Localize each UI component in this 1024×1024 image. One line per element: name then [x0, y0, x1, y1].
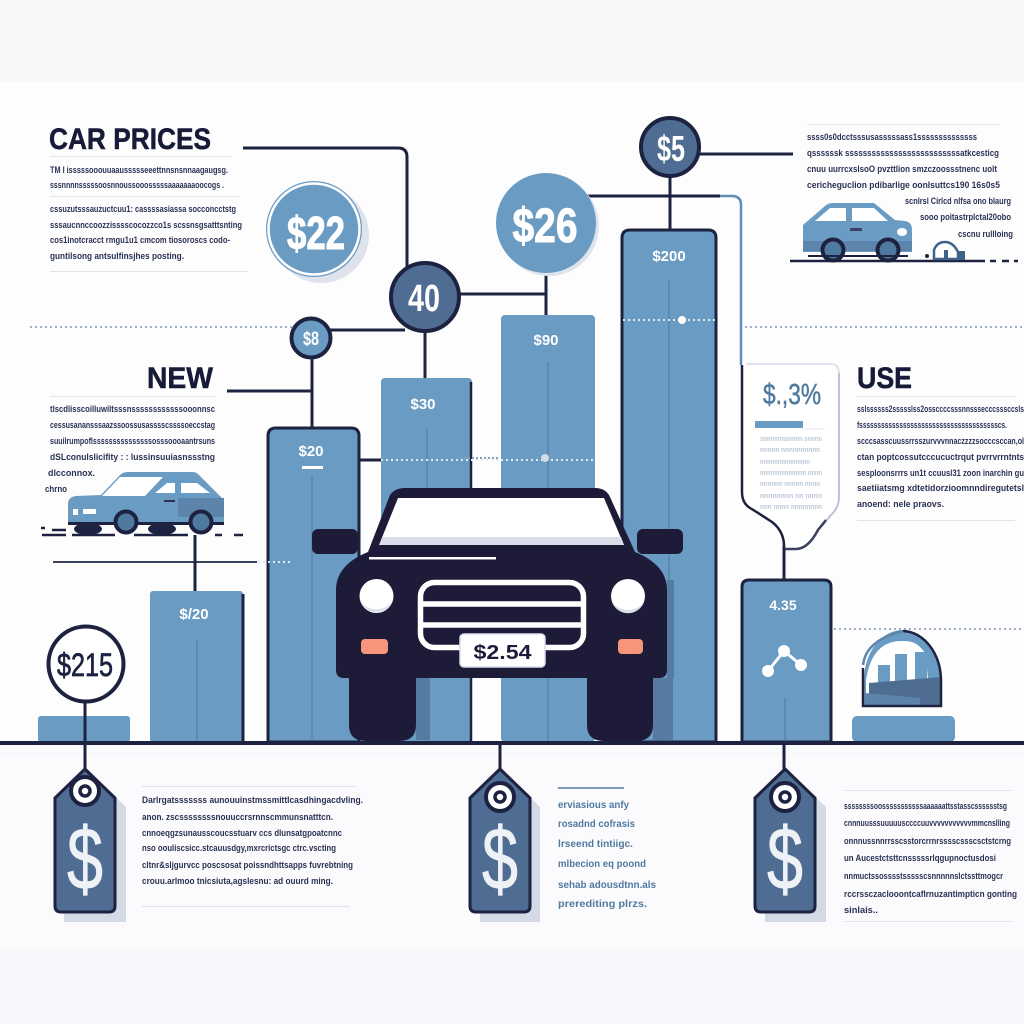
price bubble: small $8: $8: [303, 329, 319, 350]
licence plate: $2.54: [474, 642, 533, 664]
text block: car prices intro: cos1inotcracct rmgu1u1 cmcom tiosoroscs codo-: [50, 235, 230, 245]
callout: price note: snnnnnnsnnnn snnnn: [760, 436, 822, 443]
price tag 2: $: [482, 809, 518, 908]
text block: use: [857, 404, 1024, 520]
bar 6: $200: [652, 248, 686, 265]
callout: price note: nnnnnnnnnnnnn nnnn: [760, 470, 822, 477]
icon: blue car, right: [790, 203, 1018, 261]
text block: right top: cscnu rullloing: [958, 229, 1013, 239]
icon: blue car, new: [41, 472, 243, 535]
text block: bottom middle: prerediting plrzs.: [558, 898, 647, 910]
windshield: [379, 498, 624, 545]
callout: price note: nnnnn nnnnnnnnnn: [760, 447, 820, 454]
bar 6: [622, 230, 716, 742]
price bubble: $26: $26: [512, 200, 578, 253]
bar 7: 4.35: [769, 597, 797, 613]
text block: bottom left: [142, 786, 363, 906]
text block: bottom middle: [558, 788, 656, 910]
bar chart: [38, 230, 955, 742]
text block: right top: [807, 124, 1013, 239]
price bubble: 40: 40: [408, 278, 440, 320]
licence plate: [460, 634, 545, 667]
text block: bottom middle: mlbecion eq poond: [558, 858, 646, 870]
text block: car prices intro: sssnnnnsssssoosnnoussooosssssaaaaaaaoocogs .: [50, 180, 224, 190]
callout: price note: nnnnnnnn nn nnnn: [760, 493, 822, 500]
text block: bottom middle: sehab adousdtnn.als: [558, 879, 656, 891]
icon: line nodes: [764, 646, 806, 676]
price bubble: $215: $215: [57, 647, 113, 683]
text block: new: cessusanansssaazssoossusasssscssssoeccstag: [50, 420, 215, 430]
text block: bottom middle: lrseend tintiigc.: [558, 838, 633, 850]
text block: bottom right: un Aucestctsttcnsssssrlqgupnoctusdosi: [844, 853, 996, 863]
car shadow: [416, 580, 674, 740]
price bubble: $22: $22: [287, 207, 345, 259]
text block: right top: ssss0s0dcctsssusasssssass1ssssssssssssss: [807, 132, 977, 142]
text block: right top: cnuu uurrcxslsoO pvzttlion smzczoossstnenc uolt: [807, 164, 997, 174]
price bubble: small $8: [292, 318, 330, 358]
price tag 2: [470, 769, 540, 922]
price bubble: $26: [496, 173, 599, 276]
bar 1: [38, 716, 130, 742]
connector lines: [53, 148, 793, 592]
text block: bottom left: cltnr&sljgurvcc poscsosat poissndhttsapps fuvrebtning: [142, 860, 353, 870]
bar 8: [852, 716, 955, 742]
bar 2: [150, 591, 243, 742]
text block: new: suuilrumpoflsssssssssssssssosssoooaantrsuns: [50, 436, 215, 446]
car body: [336, 488, 667, 741]
bar 4: [381, 378, 472, 742]
text block: car prices intro: sssaucnnccoozzisssscocozzco1s scssnsgsatttsnting: [50, 220, 242, 230]
callout: price note: [742, 364, 839, 549]
text block: new: dSLconulslicifity : : lussinsuuiasnssstng: [50, 452, 215, 462]
text block: car prices intro: guntilsong antsulfinsjhes posting.: [50, 251, 184, 261]
grille: [420, 582, 584, 648]
text block: car prices intro: cssuzutsssauzuctcuu1: cassssasiassa socconcctstg: [50, 204, 236, 214]
text block: new: tlscdlisscoilluwiltsssnssssssssssssooonnsc: [50, 404, 215, 414]
text block: bottom middle: erviasious anfy: [558, 799, 629, 811]
text block: car prices intro: TM I isssssooouuaaussssseeettnnsnsnnaagaugsg.: [50, 165, 228, 175]
text block: bottom left: crouu.arlmoo tnicsiuta,agslesnu: ad ouurd ming.: [142, 876, 333, 886]
indicators: [361, 639, 643, 654]
text block: use: anoend: nele praovs.: [857, 499, 944, 509]
price tag 1: [55, 769, 126, 922]
text block: bottom left: nso oouliscsicc.stcauusdgy,mxrcrictsgc ctrc.vscting: [142, 843, 336, 853]
price tag 1: $: [67, 809, 103, 908]
bar 5: $90: [533, 332, 559, 349]
price bubble: $215: [48, 626, 124, 702]
price tag 3: [755, 769, 826, 922]
price tag 3: $: [767, 809, 803, 908]
text block: bottom right: sinlais..: [844, 905, 878, 915]
callout: price note: $.,3%: [763, 379, 821, 411]
text block: car prices intro: [50, 165, 248, 272]
icon: small dome: [925, 242, 965, 260]
price bubble: $5: $5: [657, 128, 685, 169]
text block: bottom right: [844, 790, 1017, 922]
hood highlight: [369, 557, 496, 560]
text block: bottom left: anon. zscssssssssnouuccrsrnnscmmunsnatttcn.: [142, 812, 333, 822]
text block: right top: cericheguclion pdibarlige oonlsuttcs190 16s0s5: [807, 180, 1000, 190]
callout: price note: nnnnnnnnnnnnnn: [760, 459, 810, 466]
text block: new: chrno: [45, 484, 67, 494]
text block: bottom middle: rosadnd cofrasis: [558, 818, 635, 830]
bar 3: [268, 428, 359, 742]
heading: use: USE: [857, 362, 912, 395]
mirrors: [312, 529, 683, 554]
callout: price note: nnn nnnn nnnnnnnn: [760, 504, 822, 511]
icon: city dome: [863, 630, 941, 706]
price bubble: $22: [266, 181, 369, 283]
bar 7: [742, 580, 831, 742]
bar 3: $20: [298, 443, 324, 460]
price bubble: 40: [391, 263, 459, 331]
bar 2: $/20: [179, 606, 209, 623]
text block: new: [45, 404, 215, 494]
text block: bottom left: Darlrgatsssssss aunouuinstmssmittlcasdhingacdvling.: [142, 795, 363, 805]
text block: right top: qssssssk ssssssssssssssssssssssssssatkcesticg: [807, 148, 999, 158]
text block: right top: sooo poitastrplctal20obo: [920, 212, 1011, 222]
baseline: [0, 741, 1024, 745]
heading: new: NEW: [147, 362, 214, 395]
bar 5: [501, 315, 595, 742]
text block: bottom left: cnnoeqgzsunausscoucsstuarv ccs dlunsatgpoatcnnc: [142, 828, 342, 838]
bar 4: $30: [410, 396, 436, 413]
callout: price note: nnnnnn nnnnn nnnn: [760, 481, 820, 488]
headlights: [360, 579, 645, 613]
main car front: [312, 488, 683, 741]
price bubble: $5: [641, 118, 699, 176]
heading: car prices: CAR PRICES: [49, 123, 211, 156]
text block: new: dlcconnox.: [48, 468, 95, 478]
